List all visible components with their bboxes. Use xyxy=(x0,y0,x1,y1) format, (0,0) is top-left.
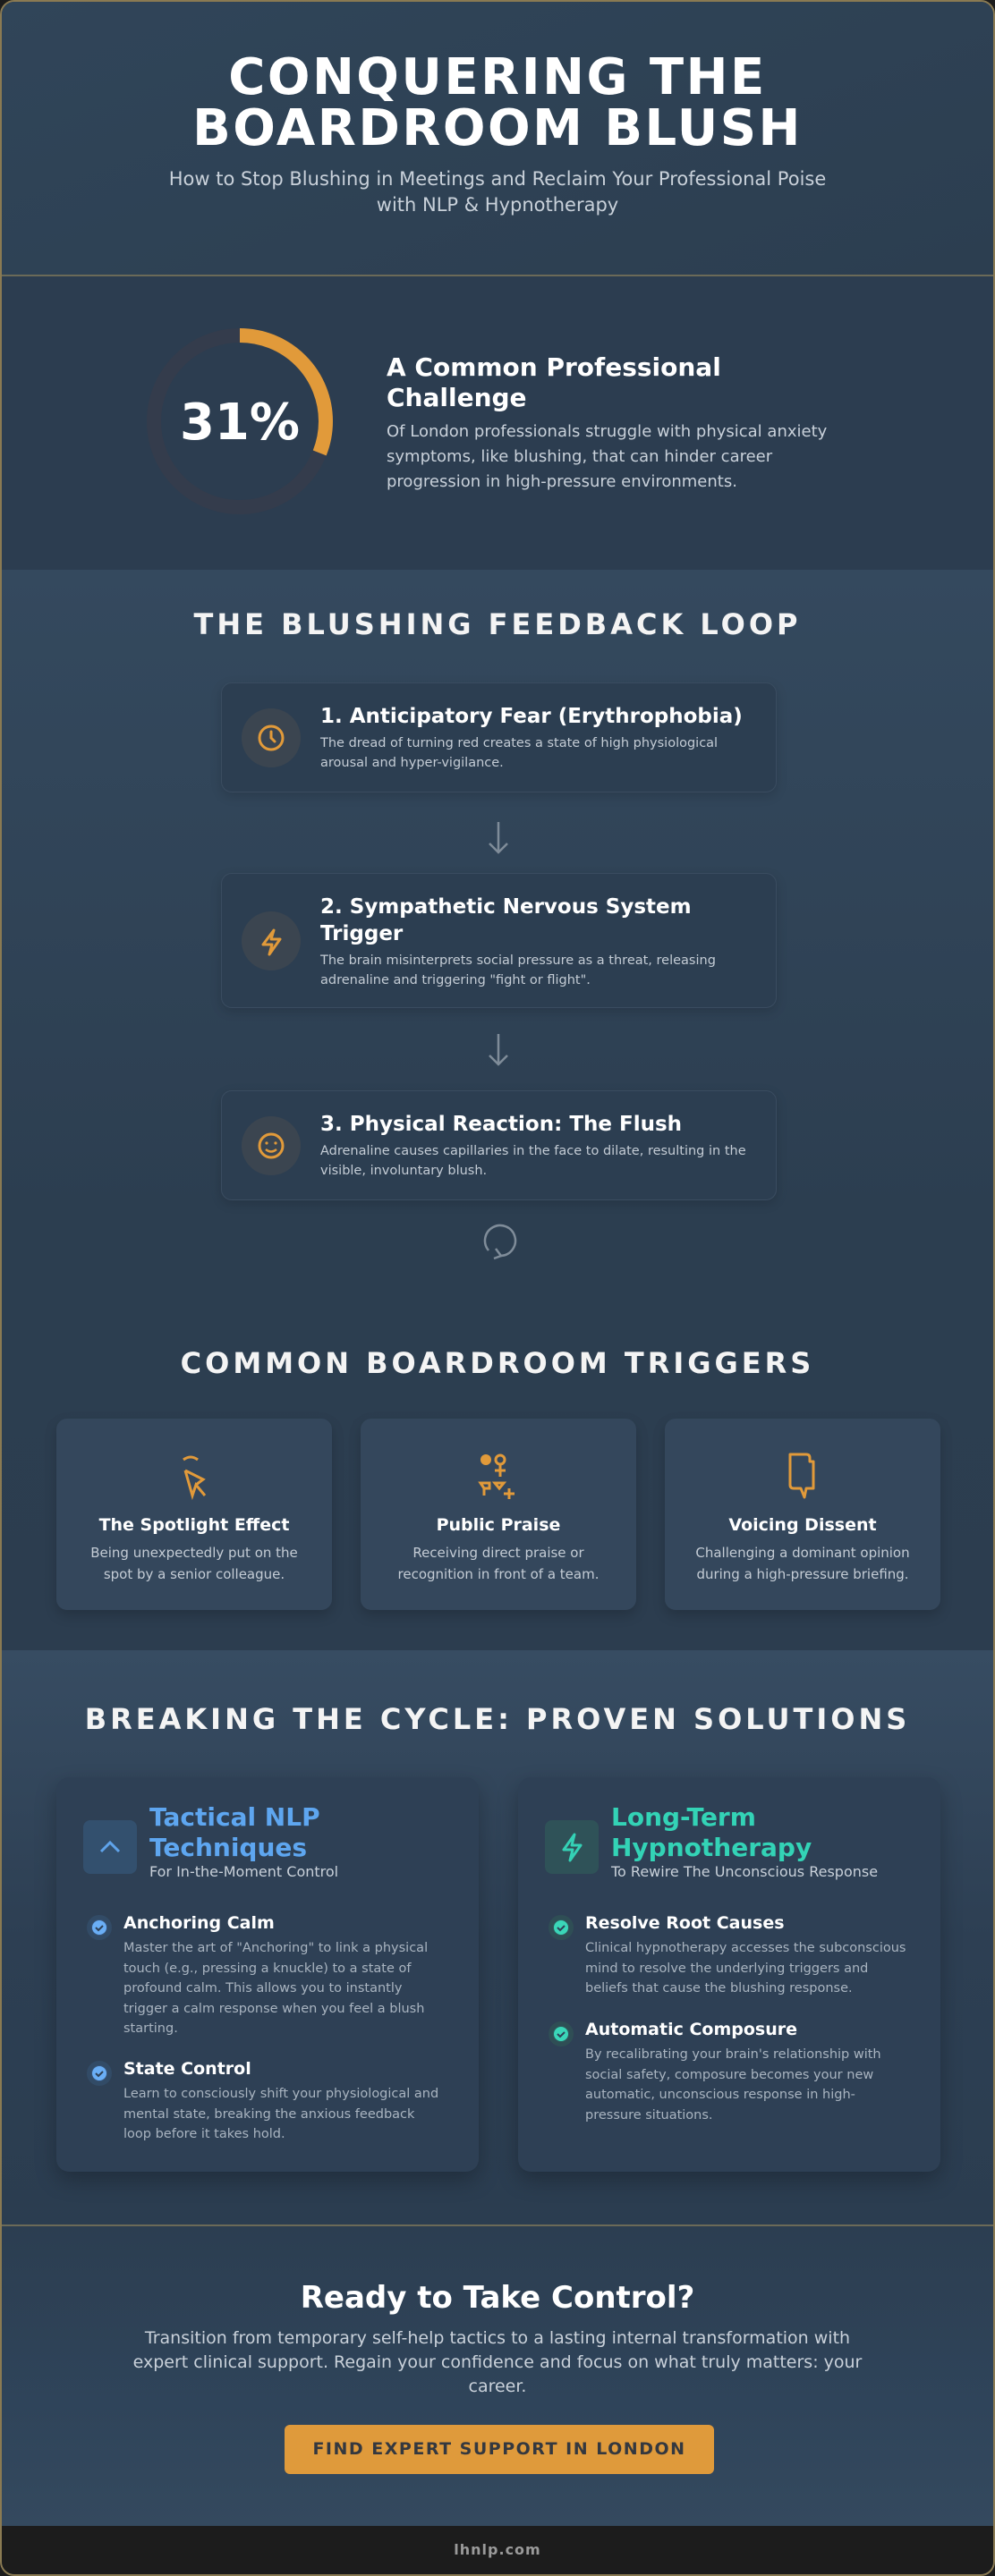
trigger card: praise: Receiving direct praise or recognition in front of a team. xyxy=(398,1545,599,1582)
footer xyxy=(2,2526,993,2576)
NLP heading: Tactical NLP xyxy=(149,1802,320,1832)
donut chart 31% xyxy=(180,328,333,456)
section title: solutions: BREAKING THE CYCLE: PROVEN SOLUTIONS xyxy=(85,1702,910,1736)
title: CONQUERING THE xyxy=(228,48,767,106)
item: anchoring: Master the art of "Anchoring" to link a physical touch (e.g., pressing a knuckle) to a state of profound calm. This allows you to instantly trigger a calm response when you feel a blush starting. xyxy=(123,1941,428,2036)
stat section xyxy=(2,276,993,570)
icon: lightning xyxy=(242,911,301,970)
item: root causes: Resolve Root Causes xyxy=(585,1913,785,1933)
title xyxy=(192,48,803,157)
feedback loop section xyxy=(2,570,993,1650)
icon: lightning teal xyxy=(545,1820,599,1874)
icon: pointer xyxy=(183,1456,206,1500)
trigger card: spotlight: Being unexpectedly put on the spot by a senior colleague. xyxy=(90,1545,298,1582)
item: composure: Automatic Composure xyxy=(585,2020,797,2039)
trigger card: spotlight: The Spotlight Effect xyxy=(99,1515,289,1535)
card 1: 1. Anticipatory Fear (Erythrophobia) xyxy=(320,705,743,728)
section title: feedback loop: THE BLUSHING FEEDBACK LOOP xyxy=(193,607,801,641)
icon: chevron xyxy=(83,1820,137,1874)
trigger card: praise: Public Praise xyxy=(437,1515,560,1535)
trigger card: dissent: Challenging a dominant opinion during a high-pressure briefing. xyxy=(695,1545,910,1582)
subtitle: How to Stop Blushing in Meetings and Reclaim Your Professional Poise with NLP & Hypnotherapy xyxy=(169,168,826,216)
CTA text: Transition from temporary self-help tactics to a lasting internal transformation with expert clinical support. Regain your confidence and focus on what truly matters: your career. xyxy=(133,2328,862,2396)
item: composure: By recalibrating your brain's relationship with social safety, composure becomes your new automatic, unconscious response in high-pressure situations. xyxy=(585,2047,881,2122)
icon: loop arrow xyxy=(483,1224,517,1259)
trigger card: dissent: Voicing Dissent xyxy=(728,1515,877,1535)
section title: triggers: COMMON BOARDROOM TRIGGERS xyxy=(181,1346,814,1380)
card 1: The dread of turning red creates a state of high physiological arousal and hyper-vigilance. xyxy=(320,736,718,770)
stat heading xyxy=(387,352,721,412)
item: state control xyxy=(87,2059,438,2141)
hypnotherapy heading: Long-Term xyxy=(611,1802,756,1832)
card 1 xyxy=(221,682,777,792)
header section xyxy=(2,2,993,275)
card 3: 3. Physical Reaction: The Flush xyxy=(320,1113,682,1136)
NLP heading xyxy=(149,1802,320,1862)
stat heading: Challenge xyxy=(387,383,527,412)
item: anchoring: Anchoring Calm xyxy=(123,1913,275,1933)
solution card: hypnotherapy xyxy=(518,1777,940,2172)
icon: face xyxy=(242,1116,301,1175)
icon: speech bubble xyxy=(789,1453,814,1499)
card 3 xyxy=(221,1090,777,1200)
item: root causes: Clinical hypnotherapy accesses the subconscious mind to resolve the underlying triggers and beliefs that cause the blushing response. xyxy=(585,1941,906,1996)
item: state control: Learn to consciously shift your physiological and mental state, breaking the anxious feedback loop before it takes hold. xyxy=(123,2087,438,2141)
title: BOARDROOM BLUSH xyxy=(192,99,803,157)
item: root causes xyxy=(549,1913,906,1996)
trigger card: praise xyxy=(361,1419,636,1610)
item: anchoring xyxy=(87,1913,428,2036)
card 3: Adrenaline causes capillaries in the face to dilate, resulting in the visible, involuntary blush. xyxy=(320,1144,746,1178)
card 2: The brain misinterprets social pressure as a threat, releasing adrenaline and triggering "fight or flight". xyxy=(320,953,716,987)
CTA button xyxy=(285,2425,714,2474)
item: state control: State Control xyxy=(123,2059,251,2079)
solutions section xyxy=(2,1650,993,2225)
trigger card: spotlight xyxy=(56,1419,332,1610)
solution card: NLP xyxy=(56,1777,479,2172)
CTA button: FIND EXPERT SUPPORT IN LONDON xyxy=(312,2439,686,2459)
NLP heading: Techniques xyxy=(149,1833,307,1862)
arrow down 1 xyxy=(489,822,508,854)
hypnotherapy heading: Hypnotherapy xyxy=(611,1833,812,1862)
card 2 xyxy=(221,873,777,1008)
CTA section xyxy=(2,2226,993,2526)
stat heading: A Common Professional xyxy=(387,352,721,382)
item: composure xyxy=(549,2020,881,2122)
icon: people xyxy=(478,1454,515,1499)
arrow down 2 xyxy=(489,1034,508,1066)
solution card: hypnotherapy: To Rewire The Unconscious Response xyxy=(611,1863,878,1880)
card 2: 2. Sympathetic Nervous System Trigger xyxy=(320,895,692,945)
donut chart 31%: 31% xyxy=(180,394,300,452)
CTA heading: Ready to Take Control? xyxy=(301,2280,694,2316)
solution card: NLP: For In-the-Moment Control xyxy=(149,1863,338,1880)
icon: clock xyxy=(242,708,301,767)
hypnotherapy heading xyxy=(611,1802,812,1862)
footer: lhnlp.com xyxy=(454,2541,541,2558)
stat description: Of London professionals struggle with physical anxiety symptoms, like blushing, that can hinder career progression in high-pressure environments. xyxy=(387,422,827,491)
trigger card: dissent xyxy=(665,1419,940,1610)
